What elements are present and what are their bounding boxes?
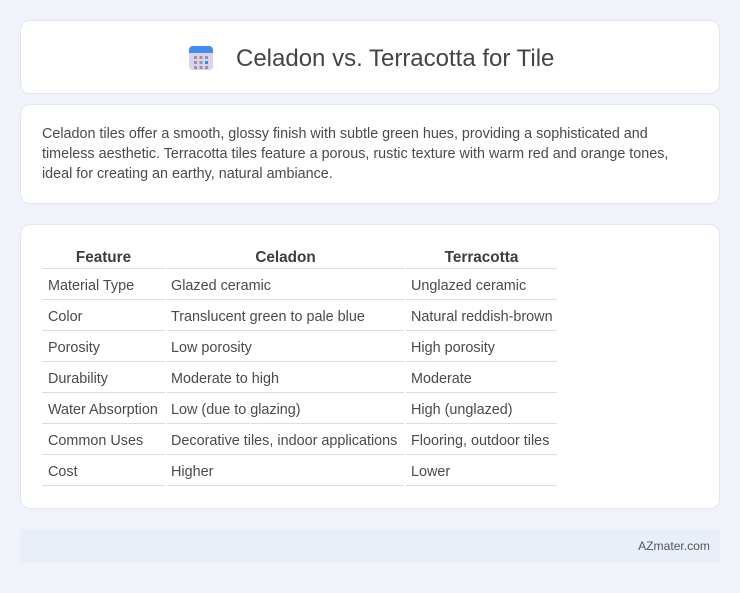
panel: comparison table [20, 224, 720, 509]
comparison table: Water Absorption [48, 402, 158, 418]
comparison table: Unglazed ceramic [411, 278, 526, 294]
footer bar [20, 529, 720, 563]
icon: calendar [189, 46, 213, 70]
text block: description: Celadon tiles offer a smooth, glossy finish with subtle green hues, providing a sophisticated and [42, 126, 648, 142]
comparison table [42, 249, 557, 486]
comparison table: Feature [76, 249, 131, 266]
title: Celadon vs. Terracotta for Tile [236, 45, 554, 72]
comparison table: Lower [411, 464, 450, 480]
comparison table: High porosity [411, 340, 495, 356]
comparison table: Low (due to glazing) [171, 402, 301, 418]
comparison table: Moderate [411, 371, 472, 387]
comparison table: Low porosity [171, 340, 252, 356]
comparison table: Color [48, 309, 82, 325]
comparison table: Porosity [48, 340, 100, 356]
text block: description [42, 126, 668, 182]
comparison table: Material Type [48, 278, 134, 294]
comparison table: Durability [48, 371, 108, 387]
text block: description: timeless aesthetic. Terracotta tiles feature a porous, rustic texture with warm red and orange tones, [42, 146, 668, 162]
comparison table: High (unglazed) [411, 402, 513, 418]
comparison table: Decorative tiles, indoor applications [171, 433, 397, 449]
text block: description: ideal for creating an earthy, natural ambiance. [42, 166, 333, 182]
comparison table: Common Uses [48, 433, 143, 449]
comparison table: Glazed ceramic [171, 278, 271, 294]
comparison table: Terracotta [445, 249, 518, 266]
comparison table: Flooring, outdoor tiles [411, 433, 549, 449]
comparison table: Translucent green to pale blue [171, 309, 365, 325]
comparison table: Celadon [255, 249, 316, 266]
panel: intro description [20, 104, 720, 204]
comparison table: Natural reddish-brown [411, 309, 553, 325]
panel: title header [20, 20, 720, 94]
comparison table: Higher [171, 464, 213, 480]
footer text: AZmater.com [638, 539, 710, 553]
comparison table: Moderate to high [171, 371, 279, 387]
comparison table: Cost [48, 464, 78, 480]
